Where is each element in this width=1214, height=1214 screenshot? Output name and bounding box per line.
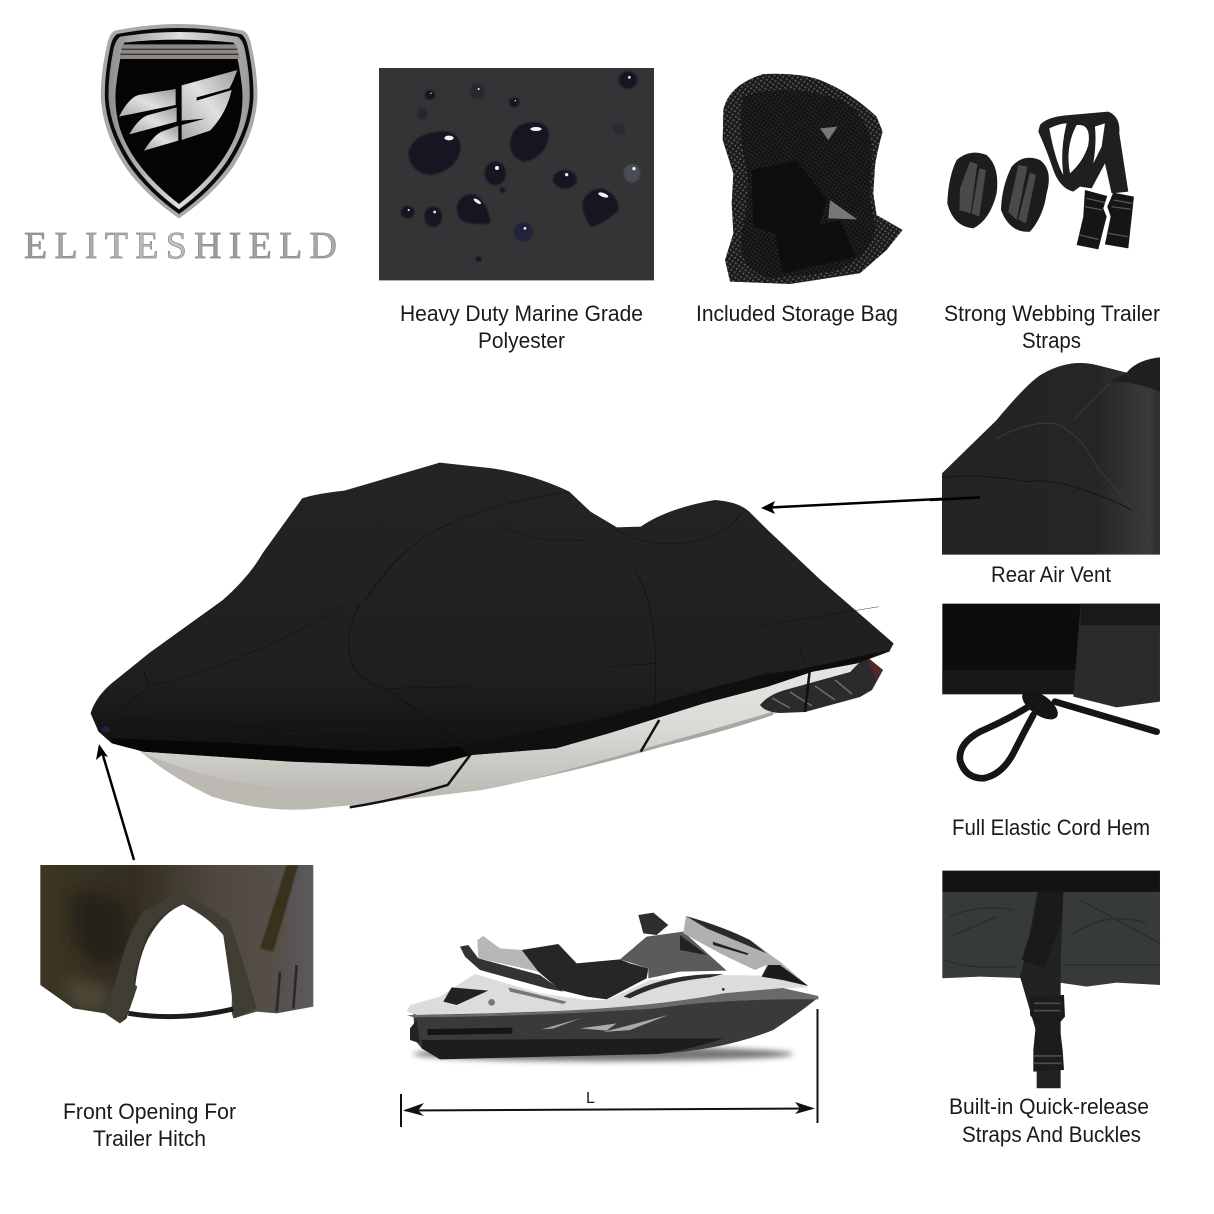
rear seat xyxy=(477,936,538,972)
arrow: rear air vent pointer xyxy=(761,497,980,514)
main product: jet ski with black cover xyxy=(91,463,894,810)
webbing binding xyxy=(105,893,177,1023)
hull tie-down straps xyxy=(350,720,659,807)
fabric texture xyxy=(379,68,654,280)
buckles xyxy=(1077,190,1107,249)
label: buckles xyxy=(949,1094,1149,1147)
main seat xyxy=(522,944,648,999)
ground shadow xyxy=(413,1047,793,1061)
label: straps: Straps xyxy=(1022,328,1081,353)
label: straps: Strong Webbing Trailer xyxy=(944,301,1160,326)
label: front opening xyxy=(63,1099,236,1151)
dimension arrow: length L xyxy=(401,1009,818,1127)
water droplets xyxy=(401,71,640,262)
logo: EliteShield shield and wordmark xyxy=(24,24,337,267)
grey skirt xyxy=(942,892,1160,987)
plastic buckle xyxy=(1030,995,1065,1072)
panel: mesh storage bag xyxy=(723,74,903,284)
white hull under cover xyxy=(138,660,868,810)
stickers xyxy=(508,987,567,1004)
deck xyxy=(407,974,808,1015)
console xyxy=(620,932,727,978)
vent flap seams xyxy=(942,476,1132,510)
darker contents xyxy=(741,90,877,278)
arrow tail inside photo xyxy=(930,497,980,500)
strap coil left xyxy=(947,153,997,228)
elastic cord xyxy=(128,1009,233,1017)
icon: ES wing monogram xyxy=(119,70,237,151)
grey hem fabric xyxy=(1073,604,1160,707)
hull xyxy=(413,997,818,1057)
engine scoop and rear details xyxy=(443,987,488,1005)
nose fairing xyxy=(683,916,808,986)
label: buckles: Straps And Buckles xyxy=(962,1122,1141,1147)
label: front opening: Front Opening For xyxy=(63,1099,236,1124)
strap loops xyxy=(1038,112,1128,193)
label: fabric xyxy=(400,301,643,353)
illustration: jet ski side view with length dimension xyxy=(407,913,818,1061)
label: L: L xyxy=(586,1090,595,1107)
black cover band xyxy=(942,871,1160,892)
dark hem band xyxy=(112,738,469,767)
arrow: front opening pointer xyxy=(96,744,134,860)
hull graphic streaks xyxy=(542,1015,668,1032)
cover hood shape xyxy=(942,357,1160,555)
black cover shape xyxy=(91,463,894,767)
strap coil right xyxy=(1001,158,1049,232)
cover seam lines xyxy=(112,492,879,743)
panel: quick-release buckle photo xyxy=(942,871,1160,1088)
rear vent grille xyxy=(760,657,883,713)
white opening xyxy=(133,904,232,1008)
panel: front opening photo xyxy=(40,865,313,1023)
bag body xyxy=(723,74,903,284)
label: straps xyxy=(944,301,1160,353)
label: buckles: Built-in Quick-release xyxy=(949,1094,1149,1119)
fabric xyxy=(40,865,313,1023)
panel: polyester fabric swatch xyxy=(379,68,654,280)
panel: webbing trailer straps xyxy=(947,112,1134,249)
icon: shield emblem xyxy=(101,24,257,218)
label: storage bag: Included Storage Bag xyxy=(696,301,898,326)
panel: elastic cord hem photo xyxy=(942,604,1160,778)
wordmark: ELITESHIELD: ELITESHIELD xyxy=(24,225,337,267)
handlebars xyxy=(638,913,668,935)
label: cord hem: Full Elastic Cord Hem xyxy=(952,815,1150,840)
label: fabric: Heavy Duty Marine Grade xyxy=(400,301,643,326)
webbing strap xyxy=(1020,892,1063,1088)
label: front opening: Trailer Hitch xyxy=(93,1126,206,1151)
black fabric xyxy=(942,604,1081,694)
panel: rear air vent photo xyxy=(930,357,1160,555)
label: rear air vent: Rear Air Vent xyxy=(991,562,1111,587)
elastic cord loop and knot xyxy=(960,702,1157,778)
label: fabric: Polyester xyxy=(478,328,565,353)
